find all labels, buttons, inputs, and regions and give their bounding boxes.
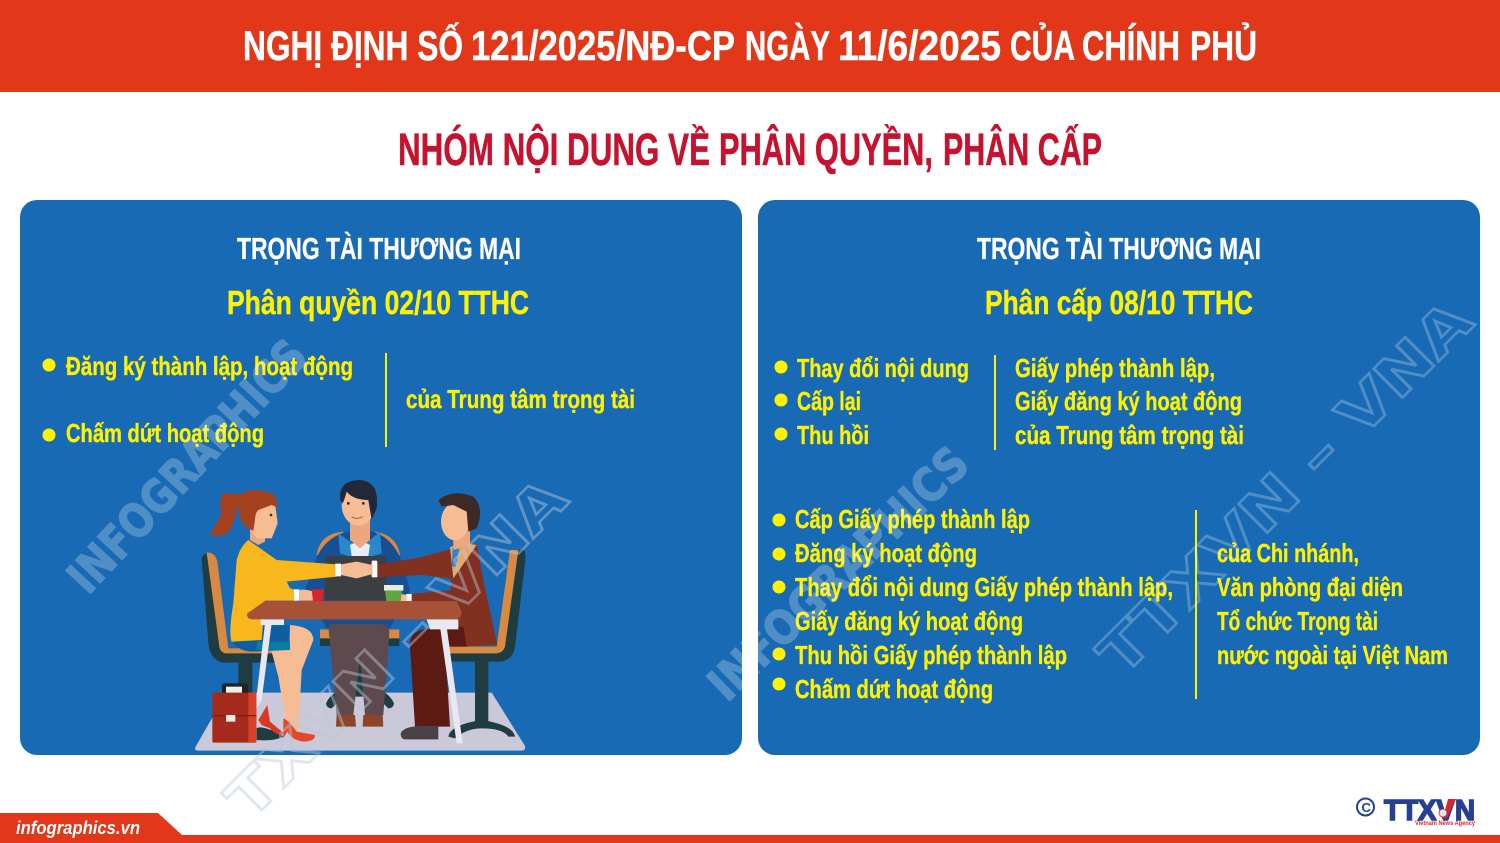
- watermark: INFOGRAPHICS left: INFOGRAPHICS: [57, 329, 318, 604]
- panel heading: left: TRỌNG TÀI THƯƠNG MẠI: [237, 231, 521, 266]
- illustration: business meeting handshake: [195, 480, 526, 751]
- bullet list: chi nhánh: Giấy đăng ký hoạt động: [795, 606, 1023, 636]
- text: chi nhánh nước ngoài: Tổ chức Trọng tài: [1217, 606, 1378, 636]
- panel subheading: right: Phân cấp 08/10 TTHC: [985, 284, 1253, 321]
- main title: CHÍNH: [1082, 22, 1180, 69]
- woman head: [250, 528, 265, 545]
- main title: [243, 21, 1257, 69]
- text: giấy phép trung tâm: [1015, 353, 1244, 450]
- watermark: TXVN - VNA left: TXVN – VNA: [214, 465, 581, 832]
- cups and paper: [306, 602, 330, 608]
- main title: NGHỊ ĐỊNH SỐ: [243, 21, 463, 69]
- subtitle heading: PHÂN QUYỀN,: [719, 124, 933, 175]
- text: chi nhánh nước ngoài: của Chi nhánh,: [1217, 538, 1359, 568]
- bullet list: chi nhánh: Thu hồi Giấy phép thành lập: [795, 640, 1067, 670]
- hands: [341, 562, 373, 578]
- logo: TTXVN: TTXVN: [1384, 795, 1475, 827]
- panel heading: right: TRỌNG TÀI THƯƠNG MẠI: [977, 231, 1261, 266]
- text: giấy phép trung tâm: Giấy đăng ký hoạt động: [1015, 386, 1242, 416]
- watermark: TTXVN - VNA right: TTXVN – VNA: [1086, 288, 1486, 688]
- watermark: INFOGRAPHICS right: INFOGRAPHICS: [697, 436, 979, 711]
- main title: CỦA: [1010, 21, 1075, 69]
- bullet list: trung tâm: Cấp lại: [797, 386, 861, 416]
- panel subheading: left: Phân quyền 02/10 TTHC: [227, 284, 529, 321]
- main title: 121/2025/NĐ-CP: [471, 22, 735, 69]
- right man: [450, 544, 497, 647]
- text: chi nhánh nước ngoài: [1217, 538, 1448, 670]
- main title: NGÀY: [745, 22, 830, 69]
- bullet list: left: Đăng ký thành lập, hoạt động: [66, 351, 353, 381]
- text: chi nhánh nước ngoài: Văn phòng đại diện: [1217, 572, 1403, 602]
- bullet list: trung tâm: Thu hồi: [797, 420, 869, 450]
- left chair: [202, 553, 282, 663]
- panel: phân quyền: [20, 200, 742, 755]
- text: của Trung tâm trọng tài: của Trung tâm trọng tài: [406, 384, 635, 414]
- woman legs: [233, 625, 313, 732]
- subtitle heading: NHÓM NỘI DUNG VỀ: [398, 124, 710, 175]
- main title: 11/6/2025: [838, 22, 1001, 69]
- bullet list: trung tâm: [774, 353, 969, 450]
- bullet list: chi nhánh: Thay đổi nội dung Giấy phép thành lập,: [795, 572, 1173, 602]
- bullet list: trung tâm: Thay đổi nội dung: [797, 353, 969, 383]
- right chair: [450, 550, 526, 662]
- bullet list: chi nhánh: Đăng ký hoạt động: [795, 538, 977, 568]
- subtitle heading: PHÂN CẤP: [943, 124, 1102, 175]
- laptop: [325, 556, 387, 600]
- bullet list: chi nhánh: [772, 504, 1173, 704]
- panel: phân cấp: [758, 200, 1480, 755]
- header band: [0, 0, 1500, 92]
- bullet list: left: [42, 351, 353, 448]
- footer bar: [0, 813, 1500, 843]
- text: giấy phép trung tâm: của Trung tâm trọng tài: [1015, 420, 1244, 450]
- subtitle heading: [398, 124, 1102, 175]
- back chair: [317, 532, 400, 557]
- woman torso and arms: [230, 540, 337, 642]
- bullet list: left: Chấm dứt hoạt động: [66, 418, 264, 448]
- text: giấy phép trung tâm: Giấy phép thành lập,: [1015, 353, 1215, 383]
- centre man: [305, 532, 410, 628]
- footer site label: infographics.vn: [16, 818, 140, 838]
- briefcase: [212, 683, 256, 743]
- table: [247, 601, 462, 619]
- bullet list: chi nhánh: Chấm dứt hoạt động: [795, 674, 993, 704]
- main title: PHỦ: [1190, 21, 1257, 69]
- logo: TTXVN: C: [1362, 800, 1372, 815]
- bullet list: chi nhánh: Cấp Giấy phép thành lập: [795, 504, 1030, 534]
- logo: TTXVN: Vietnam News Agency: [1415, 820, 1475, 827]
